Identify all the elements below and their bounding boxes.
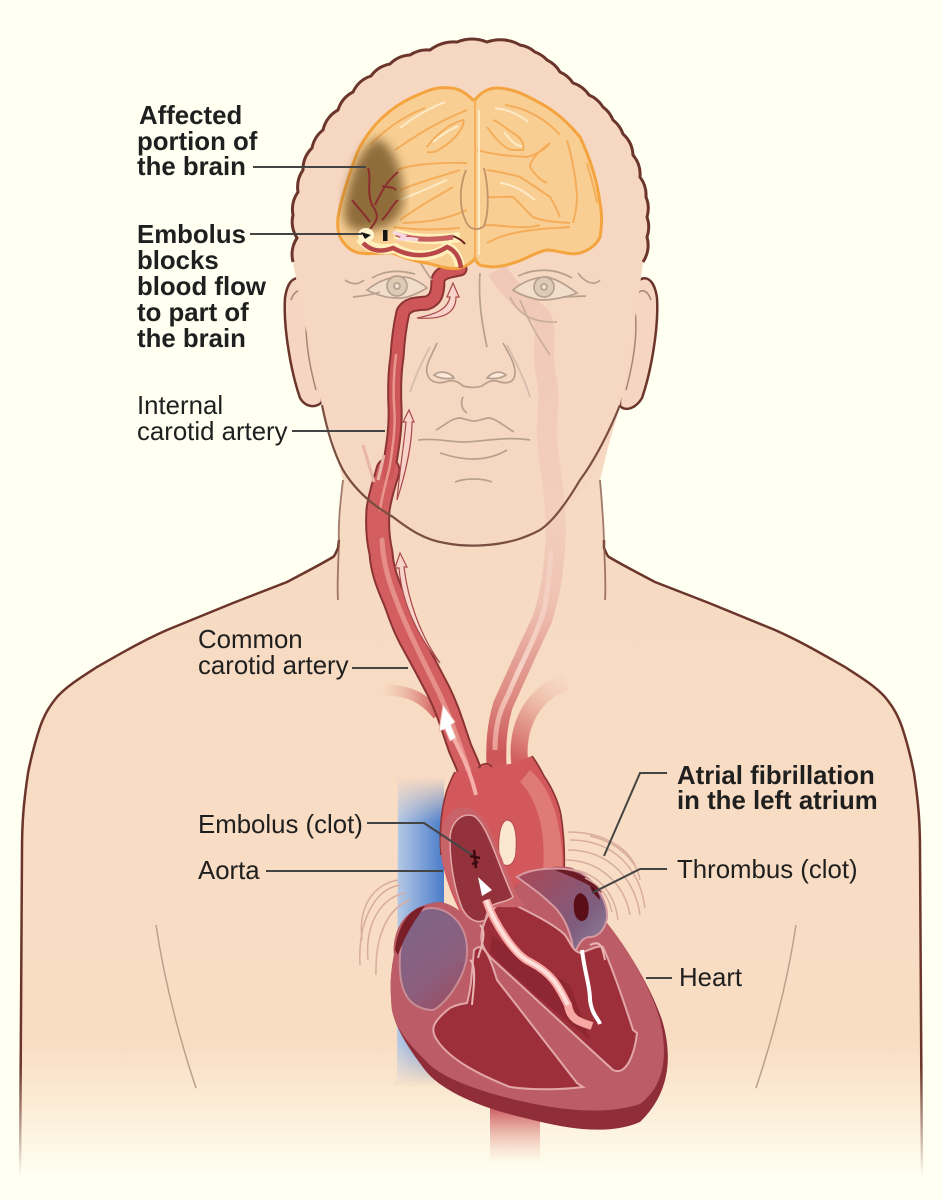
head: [292, 39, 649, 546]
blood flow core: [486, 900, 568, 1005]
valve lines: [470, 925, 605, 1005]
leader lines: [250, 167, 672, 978]
brain: [338, 88, 602, 269]
aortic arch: [440, 756, 564, 930]
aortic lumen: [450, 815, 513, 922]
label: embolus blocks: Embolus: [137, 221, 246, 249]
flow tail into carotid: [452, 735, 476, 795]
label: affected portion: Affected: [139, 102, 242, 130]
left ventricle: [481, 902, 637, 1071]
arch outline: [440, 756, 564, 875]
nose: [410, 273, 530, 413]
heart wall: [391, 867, 668, 1130]
blood flow through left ventricle: [486, 900, 592, 1026]
label: internal carotid: carotid artery: [137, 418, 288, 446]
label: common carotid: carotid artery: [198, 652, 349, 680]
face features: [345, 262, 600, 482]
jaw: [322, 405, 620, 546]
label: embolus blocks: blocks: [137, 247, 219, 275]
blocked vessel branch: [396, 234, 453, 239]
left subclavian branch: [383, 690, 438, 715]
torso: [20, 400, 922, 1180]
left eye: [345, 262, 432, 298]
ears: [285, 278, 657, 409]
brain highlights: [400, 102, 535, 255]
label: common carotid: Common: [198, 626, 303, 654]
label: internal carotid: Internal: [137, 392, 223, 420]
right atrium: [400, 908, 467, 1010]
embolus: [383, 230, 388, 241]
left atrium: [517, 869, 607, 955]
label: heart: Heart: [679, 964, 742, 992]
label: atrial fibrillation: in the left atrium: [677, 787, 878, 815]
pulmonary opening: [499, 820, 516, 865]
chest lines: [156, 925, 796, 1088]
vena cava: [394, 776, 446, 1086]
label: aorta: Aorta: [198, 857, 260, 885]
infarct region: [344, 138, 403, 231]
right carotid faded: [495, 270, 556, 775]
blood flow arrows in artery: [395, 283, 459, 663]
aortic root: [441, 807, 524, 923]
label: affected portion: the brain: [137, 153, 246, 181]
label: embolus blocks: to part of: [137, 299, 249, 327]
vessel opening: [358, 228, 374, 242]
blood flow from left atrium: [582, 950, 600, 1024]
label: atrial fibrillation: Atrial fibrillation: [677, 762, 875, 790]
heart myocardium: [391, 867, 664, 1111]
right subclavian branch: [519, 682, 566, 775]
left atrial wall clot: [555, 870, 602, 893]
arch highlight: [520, 770, 563, 882]
right eye: [510, 270, 600, 355]
vessels in infarct: [352, 168, 398, 238]
label: affected portion: portion of: [137, 128, 258, 156]
mouth: [418, 418, 530, 482]
flow arrow into carotid: [439, 705, 456, 741]
left ventricle inner shade: [490, 935, 590, 1040]
internal and common carotid artery: [378, 269, 472, 778]
right ventricle: [433, 947, 583, 1089]
label: embolus blocks: blood flow: [137, 273, 267, 301]
neck lines: [338, 480, 605, 600]
shoulder outline: [20, 540, 922, 1180]
brain gyri lines: [370, 100, 597, 262]
middle cerebral artery: [363, 243, 461, 268]
brain outline: [338, 88, 602, 269]
hairline: [292, 39, 649, 262]
arrow in brain artery: [393, 232, 418, 240]
label: thrombus: Thrombus (clot): [677, 856, 858, 884]
third ventricle outline: [461, 168, 488, 229]
thrombus: [574, 885, 600, 921]
label: embolus blocks: the brain: [137, 325, 246, 353]
dark vessel end: [453, 236, 465, 244]
pale halo around vessels: [360, 234, 460, 266]
fibrillation waves right atrium: [360, 880, 410, 975]
arrowhead aorta: [478, 877, 492, 896]
embolus in aorta: [470, 850, 480, 868]
descending aorta: [490, 1105, 540, 1163]
right atrial wall shade: [395, 906, 425, 955]
label: embolus clot: Embolus (clot): [198, 811, 363, 839]
fibrillation waves left atrium: [565, 832, 645, 920]
facial artery branches: [363, 445, 384, 482]
heart: [391, 807, 668, 1130]
